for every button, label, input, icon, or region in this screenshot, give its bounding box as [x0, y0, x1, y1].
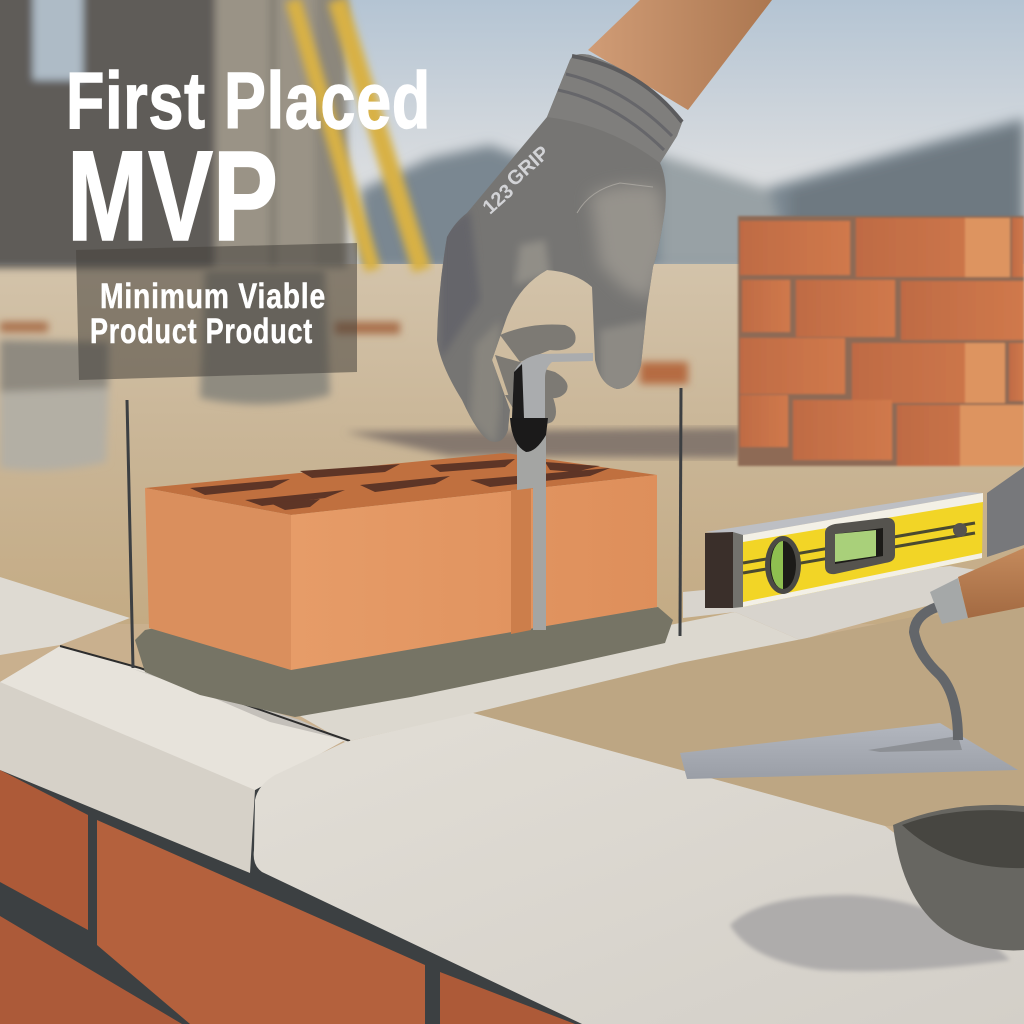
ground	[0, 264, 1024, 624]
background building	[0, 0, 347, 268]
left concrete slab	[0, 646, 350, 873]
title	[66, 56, 431, 268]
gloved hand: 123	[479, 180, 518, 219]
trowel on slab	[680, 548, 1024, 779]
glove fingers holding tool	[495, 324, 576, 425]
gloved hand	[437, 54, 683, 445]
subtitle panel: Minimum Viable	[100, 277, 326, 316]
yellow ladders	[293, 0, 422, 270]
subtitle panel: Product Product	[90, 312, 313, 351]
mortar bed	[135, 607, 673, 717]
background brick wall	[738, 216, 1024, 466]
distant mountains	[360, 118, 1024, 270]
sand patch	[473, 608, 1024, 830]
arm	[588, 0, 772, 110]
title: First Placed	[66, 56, 431, 145]
subtitle panel	[76, 243, 357, 380]
spirit level	[705, 467, 1024, 608]
mixing bowl	[893, 805, 1024, 950]
upper concrete strip	[0, 577, 130, 655]
main brick	[145, 453, 657, 670]
title: MVP	[67, 125, 278, 268]
placing tool	[510, 353, 593, 630]
background column base and bucket	[0, 270, 688, 470]
glove light and shade, clipped to the glove	[440, 185, 670, 445]
glove lettering: GRIP	[503, 142, 554, 191]
guide wires	[127, 388, 681, 668]
glove cuff with ribs	[547, 54, 683, 163]
bottom brick course	[0, 760, 600, 1024]
large concrete slab	[254, 713, 1024, 1024]
ground shadow	[345, 428, 740, 458]
sky	[0, 0, 1024, 280]
